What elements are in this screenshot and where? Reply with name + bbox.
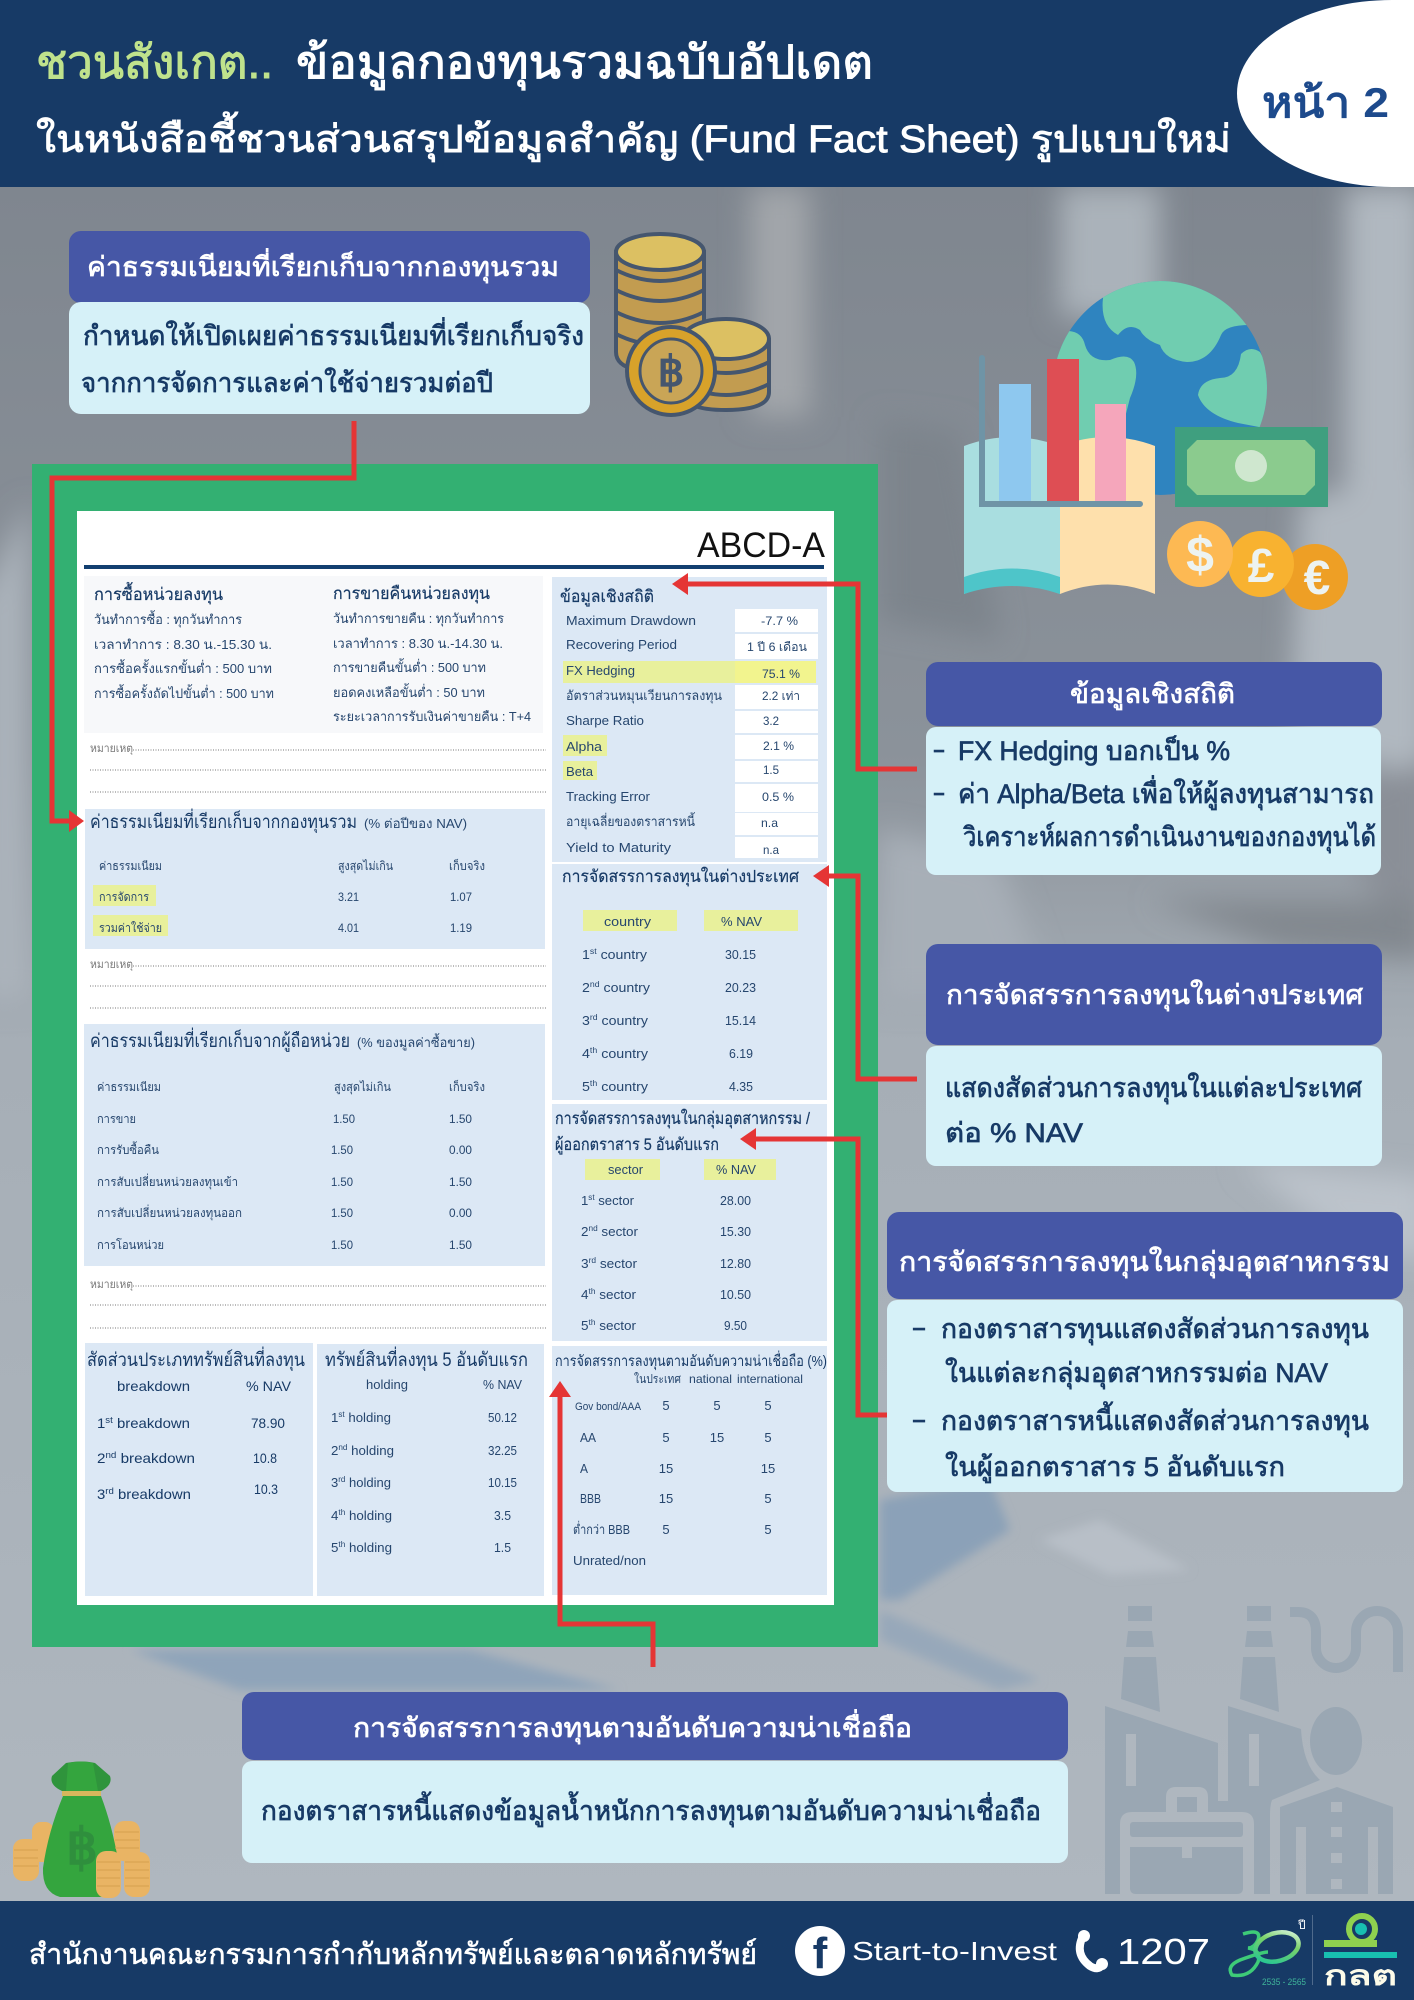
panel: asset breakdown: 10.3 xyxy=(254,1481,278,1497)
panel: foreign allocation: country xyxy=(600,980,651,995)
panel: credit rating allocation: 5 xyxy=(713,1398,721,1413)
arrow: foreign allocation xyxy=(813,865,917,1079)
callout: statistics: − xyxy=(933,779,945,809)
panel: fees charged to the fund: 1.07 xyxy=(450,890,472,904)
panel: fees charged to the fund: เก็บจริง xyxy=(449,858,485,873)
panel: sector allocation: 28.00 xyxy=(720,1193,751,1208)
panel: asset breakdown: % NAV xyxy=(246,1378,292,1394)
panel: asset breakdown: 10.8 xyxy=(253,1450,277,1466)
panel: top five holdings: % NAV xyxy=(483,1377,522,1392)
panel: fees charged to the fund: (% ต่อปีของ NAV) xyxy=(364,816,467,831)
panel: green frame xyxy=(32,464,878,1647)
panel: fees charged to unitholders: 0.00 xyxy=(449,1206,472,1220)
remark lines 1: หมายเหตุ xyxy=(90,743,133,755)
panel: fees charged to unitholders: การสับเปลี่ยนหน่วยลงทุนออก xyxy=(97,1204,242,1221)
panel: fees charged to unitholders: 1.50 xyxy=(333,1112,355,1126)
panel: foreign allocation: 30.15 xyxy=(725,947,756,962)
callout: fees charged by the fund: ค่าธรรมเนียมที่เรียกเก็บจากกองทุนรวม xyxy=(87,248,559,284)
panel: asset breakdown: breakdown xyxy=(117,1378,190,1394)
callout: fees charged by the fund: จากการจัดการและค่าใช้จ่ายรวมต่อปี xyxy=(81,367,493,398)
panel: fees charged to the fund: 3.21 xyxy=(338,890,359,904)
panel: buy and redeem: ระยะเวลาการรับเงินค่าขายคืน : T+4 xyxy=(333,709,531,724)
panel: buy and redeem: การซื้อครั้งถัดไปขั้นต่ำ : 500 บาท xyxy=(94,684,274,701)
panel: fees charged to unitholders: 1.50 xyxy=(331,1143,353,1157)
title line 2: ในหนังสือชี้ชวนส่วนสรุปข้อมูลสำคัญ (Fund Fact Sheet) รูปแบบใหม่ xyxy=(36,111,1231,162)
panel: statistics: 2.2 เท่า xyxy=(762,689,800,703)
panel: fees charged to the fund: 4.01 xyxy=(338,921,359,935)
panel: credit rating allocation: 15 xyxy=(761,1461,775,1476)
panel: sector allocation: ผู้ออกตราสาร 5 อันดับแรก xyxy=(555,1135,719,1155)
panel: statistics: Tracking Error xyxy=(566,789,651,804)
panel: top five holdings: 1 xyxy=(331,1410,338,1425)
callout: statistics: ค่า Alpha/Beta เพื่อให้ผู้ลงทุนสามารถ xyxy=(958,775,1374,811)
panel: top five holdings: holding xyxy=(345,1410,391,1425)
panel: statistics: FX Hedging xyxy=(566,663,635,678)
panel: fees charged to unitholders: การรับซื้อคืน xyxy=(97,1141,159,1157)
panel: credit rating allocation: 5 xyxy=(764,1491,772,1506)
remark lines 1 xyxy=(90,743,546,792)
panel: fees charged to unitholders: สูงสุดไม่เกิน xyxy=(334,1080,391,1095)
panel: statistics: n.a xyxy=(761,816,778,830)
panel: fees charged to the fund: ค่าธรรมเนียมที่เรียกเก็บจากกองทุนรวม xyxy=(90,808,357,834)
panel: buy and redeem xyxy=(84,576,543,733)
panel: foreign allocation: country xyxy=(597,1079,649,1094)
callout: sector allocation: ในแต่ละกลุ่มอุตสาหกรรมต่อ NAV xyxy=(945,1357,1328,1390)
panel: credit rating allocation: 15 xyxy=(659,1461,673,1476)
panel: statistics: Alpha xyxy=(566,739,603,754)
facebook page name: Start-to-Invest xyxy=(852,1936,1058,1966)
arrow: fees to fund panel xyxy=(52,421,354,832)
panel: foreign allocation: country xyxy=(604,914,652,929)
panel: top five holdings: 32.25 xyxy=(488,1443,517,1458)
callout: statistics: FX Hedging บอกเป็น % xyxy=(958,733,1230,766)
panel: top five holdings: 2 xyxy=(331,1443,338,1458)
callout: sector allocation: กองตราสารหนี้แสดงสัดส่วนการลงทุน xyxy=(941,1401,1369,1438)
panel: fees charged to the fund: ค่าธรรมเนียม xyxy=(99,859,162,873)
panel: top five holdings: holding xyxy=(345,1475,391,1490)
panel: top five holdings: holding xyxy=(345,1508,392,1523)
panel: statistics: n.a xyxy=(763,843,779,857)
panel: sector allocation: sector xyxy=(608,1162,644,1177)
panel: top five holdings: 4 xyxy=(331,1508,338,1523)
panel: fees charged to the fund: รวมค่าใช้จ่าย xyxy=(99,921,162,935)
panel: credit rating allocation: A xyxy=(580,1461,588,1476)
panel: credit rating allocation: 5 xyxy=(662,1522,670,1537)
logo: SEC: กลต xyxy=(1324,1960,1397,1991)
logo: 30 years: ปี xyxy=(1297,1918,1306,1932)
panel: top five holdings: 10.15 xyxy=(488,1475,517,1490)
panel: fees charged to unitholders: เก็บจริง xyxy=(449,1079,485,1094)
panel: fees charged to unitholders: การขาย xyxy=(97,1112,136,1126)
icon: telephone xyxy=(1078,1930,1108,1970)
panel: foreign allocation: 4 xyxy=(582,1046,589,1061)
panel: foreign allocation: st xyxy=(590,947,597,956)
briefcase xyxy=(1130,1797,1243,1894)
remark lines 3 xyxy=(90,1279,546,1328)
callout: foreign allocation: แสดงสัดส่วนการลงทุนในแต่ละประเทศ xyxy=(945,1072,1362,1105)
panel: foreign allocation: nd xyxy=(590,980,600,989)
remark lines 2 xyxy=(90,959,546,1008)
panel: statistics: อายุเฉลี่ยของตราสารหนี้ xyxy=(566,812,696,830)
panel: fees charged to unitholders: 1.50 xyxy=(449,1175,472,1189)
icon: globe, book, chart, banknote and coins xyxy=(964,270,1348,610)
panel: credit rating allocation: 5 xyxy=(764,1430,772,1445)
panel: buy and redeem: การขายคืนหน่วยลงทุน xyxy=(333,584,490,604)
panel: foreign allocation: 5 xyxy=(582,1079,589,1094)
panel: top five holdings: 1.5 xyxy=(494,1540,511,1555)
panel: sector allocation: 9.50 xyxy=(724,1318,747,1333)
panel: foreign allocation: th xyxy=(590,1046,597,1055)
panel: fees charged to the fund: 1.19 xyxy=(450,921,472,935)
panel: buy and redeem: ยอดคงเหลือขั้นต่ำ : 50 บาท xyxy=(333,683,485,700)
panel: asset breakdown: 2 xyxy=(97,1450,105,1466)
panel: statistics: 0.5 % xyxy=(762,790,794,804)
callout: foreign allocation xyxy=(926,944,1382,1166)
panel: sector allocation: การจัดสรรการลงทุนในกลุ่มอุตสาหกรรม / xyxy=(555,1108,810,1129)
panel: foreign allocation: th xyxy=(590,1079,597,1088)
callout: statistics: ข้อมูลเชิงสถิติ xyxy=(1070,679,1235,710)
panel: credit rating allocation: 15 xyxy=(710,1430,724,1445)
panel: statistics: Yield to Maturity xyxy=(566,840,672,855)
footer bar xyxy=(0,1901,1414,2000)
title line 1 xyxy=(36,36,873,91)
watermark: factory and business icons xyxy=(1105,1606,1398,1894)
document title: ABCD-A xyxy=(697,526,826,565)
panel: credit rating allocation: international xyxy=(737,1372,803,1386)
callout: statistics: − xyxy=(933,736,945,766)
panel: buy and redeem: วันทำการซื้อ : ทุกวันทำการ xyxy=(94,610,242,628)
remark lines 2: หมายเหตุ xyxy=(90,959,133,971)
phone number: 1207 xyxy=(1117,1931,1210,1972)
panel: statistics: Beta xyxy=(566,764,594,779)
panel: statistics: 75.1 % xyxy=(762,667,800,681)
panel: sector allocation: sector xyxy=(595,1318,637,1333)
panel: fees charged to the fund: สูงสุดไม่เกิน xyxy=(338,859,393,874)
open book xyxy=(964,437,1155,594)
callout: credit rating allocation xyxy=(242,1692,1068,1863)
panel: credit rating allocation: ในประเทศ xyxy=(634,1372,681,1386)
panel: sector allocation: 15.30 xyxy=(720,1224,751,1239)
banknote xyxy=(1175,427,1328,507)
panel: credit rating allocation: การจัดสรรการลงทุนตามอันดับความน่าเชื่อถือ (%) xyxy=(555,1350,827,1371)
panel: foreign allocation: country xyxy=(597,1046,649,1061)
arrow: statistics xyxy=(672,573,917,769)
panel: credit rating allocation: 5 xyxy=(662,1430,670,1445)
callout: statistics xyxy=(926,662,1382,875)
panel: asset breakdown: st xyxy=(105,1415,113,1425)
panel: fund fact sheet document xyxy=(77,511,834,1605)
panel: statistics: 2.1 % xyxy=(763,739,794,753)
panel: sector allocation: sector xyxy=(595,1193,635,1208)
panel: top five holdings: 3 xyxy=(331,1475,338,1490)
panel: fees charged to unitholders: 1.50 xyxy=(449,1112,472,1126)
icon: money bag with coins: ฿ xyxy=(66,1819,98,1875)
remark lines 3: หมายเหตุ xyxy=(90,1279,133,1291)
footer organisation name: สำนักงานคณะกรรมการกำกับหลักทรัพย์และตลาดหลักทรัพย์ xyxy=(29,1938,757,1971)
panel: statistics: Maximum Drawdown xyxy=(566,613,696,628)
panel: sector allocation: sector xyxy=(596,1256,638,1271)
panel: credit rating allocation: 15 xyxy=(659,1491,673,1506)
icon: facebook xyxy=(795,1926,845,1978)
panel: sector allocation: 1 xyxy=(581,1193,588,1208)
panel: sector allocation: % NAV xyxy=(716,1162,756,1177)
panel: asset breakdown: nd xyxy=(105,1450,116,1460)
panel: fees charged to unitholders: 1.50 xyxy=(449,1238,472,1252)
panel: statistics: ข้อมูลเชิงสถิติ xyxy=(560,587,654,607)
panel: asset breakdown: 78.90 xyxy=(251,1415,285,1431)
panel: foreign allocation: 1 xyxy=(582,947,589,962)
callout: foreign allocation: ต่อ % NAV xyxy=(945,1118,1083,1148)
callout: sector allocation: − xyxy=(912,1314,926,1344)
logo: SEC xyxy=(1324,1916,1397,1991)
panel: top five holdings: holding xyxy=(345,1540,392,1555)
panel: foreign allocation: rd xyxy=(590,1013,598,1022)
panel: credit rating allocation: 5 xyxy=(662,1398,670,1413)
panel: credit rating allocation: Unrated/non xyxy=(573,1553,646,1568)
chimneys xyxy=(1121,1606,1279,1712)
panel: buy and redeem: เวลาทำการ : 8.30 น.-15.30 น. xyxy=(94,637,272,652)
panel: fees charged to unitholders xyxy=(84,1024,545,1266)
panel: foreign allocation: 2 xyxy=(582,980,589,995)
panel: sector allocation xyxy=(552,1104,827,1341)
arrow: sector allocation xyxy=(740,1128,887,1415)
callout: sector allocation: ในผู้ออกตราสาร 5 อันดับแรก xyxy=(945,1451,1285,1483)
callout: sector allocation xyxy=(887,1212,1403,1492)
panel: foreign allocation xyxy=(552,864,827,1100)
arrow: credit rating allocation xyxy=(549,1381,653,1667)
panel: top five holdings: ทรัพย์สินที่ลงทุน 5 อันดับแรก xyxy=(325,1346,528,1372)
panel: fees charged to the fund: การจัดการ xyxy=(99,890,149,904)
panel: foreign allocation: country xyxy=(598,1013,649,1028)
currency coins: € xyxy=(1304,552,1330,605)
panel: asset breakdown: สัดส่วนประเภททรัพย์สินที่ลงทุน xyxy=(87,1346,305,1372)
factory windows xyxy=(1120,1734,1259,1894)
panel: sector allocation: 2 xyxy=(581,1224,588,1239)
panel: sector allocation: th xyxy=(589,1318,595,1327)
callout: sector allocation: − xyxy=(912,1406,926,1436)
panel: asset breakdown: 1 xyxy=(97,1415,105,1431)
panel: sector allocation: th xyxy=(589,1287,595,1296)
panel: top five holdings: nd xyxy=(338,1443,347,1452)
person head xyxy=(1310,1707,1362,1775)
currency coins: $ xyxy=(1186,527,1214,583)
panel: credit rating allocation: AA xyxy=(580,1430,596,1445)
panel: statistics xyxy=(552,577,827,862)
panel: sector allocation: st xyxy=(588,1193,595,1202)
panel: statistics: อัตราส่วนหมุนเวียนการลงทุน xyxy=(566,688,722,704)
panel: fees charged to unitholders: การสับเปลี่ยนหน่วยลงทุนเข้า xyxy=(97,1173,238,1190)
panel: statistics: 3.2 xyxy=(763,714,779,728)
panel: credit rating allocation: 5 xyxy=(764,1522,772,1537)
panel: fees charged to unitholders: ค่าธรรมเนียมที่เรียกเก็บจากผู้ถือหน่วย xyxy=(90,1027,350,1052)
panel: buy and redeem: เวลาทำการ : 8.30 น.-14.30 น. xyxy=(333,636,503,651)
panel: asset breakdown: rd xyxy=(105,1486,114,1496)
panel: fees charged to unitholders: 1.50 xyxy=(331,1175,353,1189)
panel: sector allocation: nd xyxy=(588,1224,598,1233)
callout: fees charged by the fund: กำหนดให้เปิดเผยค่าธรรมเนียมที่เรียกเก็บจริง xyxy=(83,317,584,351)
panel: fees charged to unitholders: 1.50 xyxy=(331,1238,353,1252)
callout: credit rating allocation: การจัดสรรการลงทุนตามอันดับความน่าเชื่อถือ xyxy=(353,1709,912,1745)
panel: credit rating allocation: national xyxy=(689,1372,732,1386)
panel: sector allocation: sector xyxy=(598,1224,639,1239)
panel: asset breakdown: 3 xyxy=(97,1486,105,1502)
panel: statistics: -7.7 % xyxy=(761,614,798,628)
callout: fees charged by the fund xyxy=(69,231,590,414)
panel: fees charged to unitholders: 1.50 xyxy=(331,1206,353,1220)
panel: fees charged to unitholders: (% ของมูลค่าซื้อขาย) xyxy=(357,1033,475,1051)
panel: statistics: Recovering Period xyxy=(566,637,677,652)
currency coins xyxy=(1167,521,1348,610)
panel: top five holdings: th xyxy=(338,1540,345,1549)
panel: top five holdings: holding xyxy=(347,1443,394,1458)
panel: fees charged to the fund xyxy=(85,808,545,949)
panel: top five holdings: rd xyxy=(338,1475,345,1484)
panel: foreign allocation: country xyxy=(597,947,648,962)
currency coins: £ xyxy=(1248,540,1275,593)
panel: top five holdings xyxy=(317,1344,544,1596)
panel: buy and redeem: การขายคืนขั้นต่ำ : 500 บาท xyxy=(333,658,486,675)
panel: sector allocation: 12.80 xyxy=(720,1256,751,1271)
bar chart xyxy=(982,358,1140,504)
panel: foreign allocation: 20.23 xyxy=(725,980,756,995)
page number: หน้า 2 xyxy=(1262,79,1389,126)
panel: foreign allocation: % NAV xyxy=(721,914,762,929)
panel: foreign allocation: 4.35 xyxy=(729,1079,753,1094)
panel: top five holdings: 3.5 xyxy=(494,1508,511,1523)
panel: sector allocation: 3 xyxy=(581,1256,588,1271)
panel: top five holdings: st xyxy=(338,1410,345,1419)
icon: coin stacks with baht coin: ฿ xyxy=(658,348,684,395)
panel: foreign allocation: 6.19 xyxy=(729,1046,753,1061)
pipe xyxy=(1290,1611,1398,1672)
person suit xyxy=(1280,1787,1393,1894)
panel: sector allocation: 4 xyxy=(581,1287,588,1302)
panel: foreign allocation: การจัดสรรการลงทุนในต่างประเทศ xyxy=(562,866,799,887)
logo: 30 years: 2535 - 2565 xyxy=(1262,1977,1306,1987)
icon: money bag with coins xyxy=(13,1762,150,1898)
panel: sector allocation: sector xyxy=(595,1287,637,1302)
panel: top five holdings: th xyxy=(338,1508,345,1517)
callout: foreign allocation: การจัดสรรการลงทุนในต่างประเทศ xyxy=(946,979,1363,1012)
panel: asset breakdown: breakdown xyxy=(116,1450,195,1466)
title line 1: ชวนสังเกต.. xyxy=(36,36,273,88)
globe xyxy=(1057,281,1267,495)
panel: credit rating allocation: Gov bond/AAA xyxy=(575,1401,642,1413)
panel: buy and redeem: วันทำการขายคืน : ทุกวันทำการ xyxy=(333,611,504,627)
panel: credit rating allocation: 5 xyxy=(764,1398,772,1413)
panel: fees charged to unitholders: การโอนหน่วย xyxy=(97,1238,164,1252)
panel: buy and redeem: การซื้อครั้งแรกขั้นต่ำ : 500 บาท xyxy=(94,659,272,676)
header banner xyxy=(0,0,1414,187)
factory buildings xyxy=(1105,1706,1320,1894)
callout: sector allocation: กองตราสารทุนแสดงสัดส่วนการลงทุน xyxy=(941,1314,1369,1346)
panel: top five holdings: 50.12 xyxy=(488,1410,517,1425)
panel: credit rating allocation: ต่ำกว่า BBB xyxy=(573,1521,630,1537)
callout: credit rating allocation: กองตราสารหนี้แสดงข้อมูลน้ำหนักการลงทุนตามอันดับความน่าเชื่อถือ xyxy=(261,1791,1041,1828)
title line 1: ข้อมูลกองทุนรวมฉบับอัปเดต xyxy=(296,36,873,91)
panel: sector allocation: 10.50 xyxy=(720,1287,751,1302)
panel: foreign allocation: 3 xyxy=(582,1013,589,1028)
panel: asset breakdown: breakdown xyxy=(114,1486,191,1502)
panel: sector allocation: rd xyxy=(589,1256,596,1265)
panel: fees charged to unitholders: 0.00 xyxy=(449,1143,472,1157)
panel: top five holdings: holding xyxy=(366,1377,408,1392)
panel: credit rating allocation xyxy=(552,1346,827,1595)
callout: sector allocation: การจัดสรรการลงทุนในกลุ่มอุตสาหกรรม xyxy=(899,1246,1390,1279)
panel: asset breakdown: breakdown xyxy=(113,1415,190,1431)
icon: coin stacks with baht coin xyxy=(616,234,769,415)
page number blob xyxy=(1237,0,1414,187)
panel: statistics: 1.5 xyxy=(763,763,779,777)
panel: statistics: Sharpe Ratio xyxy=(566,713,644,728)
logo: 30 years xyxy=(1230,1918,1306,1987)
panel: top five holdings: 5 xyxy=(331,1540,338,1555)
panel: asset breakdown xyxy=(85,1343,313,1596)
panel: sector allocation: 5 xyxy=(581,1318,588,1333)
panel: foreign allocation: 15.14 xyxy=(725,1013,756,1028)
panel: statistics: 1 ปี 6 เดือน xyxy=(747,640,807,654)
panel: fees charged to unitholders: ค่าธรรมเนียม xyxy=(97,1080,161,1094)
panel: buy and redeem: การซื้อหน่วยลงทุน xyxy=(94,582,223,605)
panel: credit rating allocation: BBB xyxy=(580,1491,601,1506)
icon: facebook: f xyxy=(813,1929,828,1978)
